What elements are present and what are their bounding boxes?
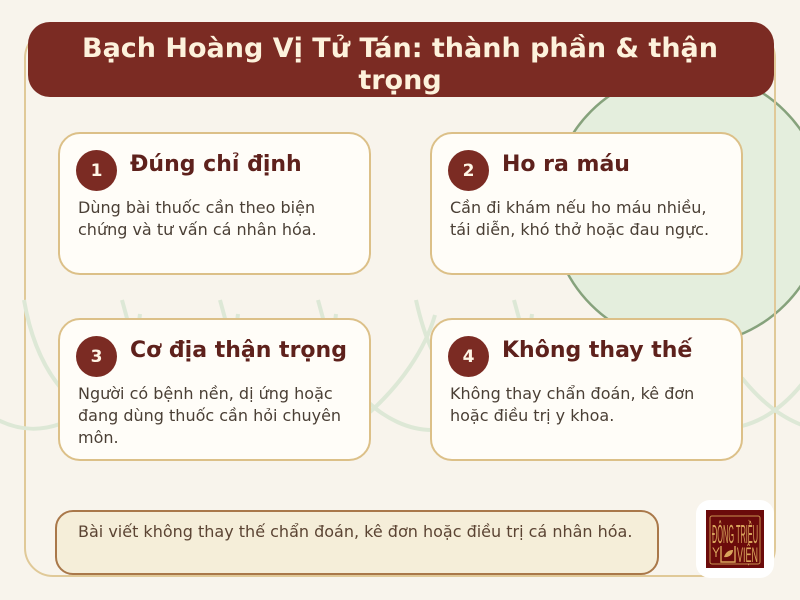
heading: card 3: Cơ địa thận trọng <box>130 338 347 363</box>
text: card 1 <box>78 198 317 239</box>
icon: logo <box>696 500 774 578</box>
text: card 3: đang dùng thuốc cần hỏi chuyên <box>78 406 341 425</box>
icon: logo: Y <box>712 544 721 560</box>
number badge 4: 4 <box>463 347 474 367</box>
number badge 2: 2 <box>463 161 474 181</box>
number badge 4 <box>448 336 489 377</box>
panel: card 1 <box>58 132 371 275</box>
panel: card 2 <box>430 132 743 275</box>
number badge 1: 1 <box>91 161 102 181</box>
heading: card 4: Không thay thế <box>502 338 692 363</box>
panel: card 4 <box>430 318 743 461</box>
heading: card 2: Ho ra máu <box>502 152 630 177</box>
text: card 3 <box>78 384 341 447</box>
heading: card 1: Đúng chỉ định <box>130 152 302 177</box>
number badge 1 <box>76 150 117 191</box>
panel: card 3 <box>58 318 371 461</box>
text: card 2: tái diễn, khó thở hoặc đau ngực. <box>450 220 709 239</box>
title: Bạch Hoàng Vị Tử Tán: thành phần & thận trọng <box>82 33 718 96</box>
number badge 3: 3 <box>91 347 102 367</box>
number badge 3 <box>76 336 117 377</box>
text: card 3: môn. <box>78 428 119 447</box>
text: card 1: Dùng bài thuốc cần theo biện <box>78 198 315 217</box>
text: card 1: chứng và tư vấn cá nhân hóa. <box>78 220 317 239</box>
text: card 4: hoặc điều trị y khoa. <box>450 406 614 425</box>
text: card 2: Cần đi khám nếu ho máu nhiều, <box>450 198 706 217</box>
text: card 4: Không thay chẩn đoán, kê đơn <box>450 384 694 403</box>
text: card 2 <box>450 198 709 239</box>
number badge 2 <box>448 150 489 191</box>
callout: disclaimer <box>55 510 659 575</box>
callout: disclaimer: Bài viết không thay thế chẩn đoán, kê đơn hoặc điều trị cá nhân hóa. <box>78 522 632 541</box>
text: card 3: Người có bệnh nền, dị ứng hoặc <box>78 384 333 403</box>
text: card 4 <box>450 384 694 425</box>
